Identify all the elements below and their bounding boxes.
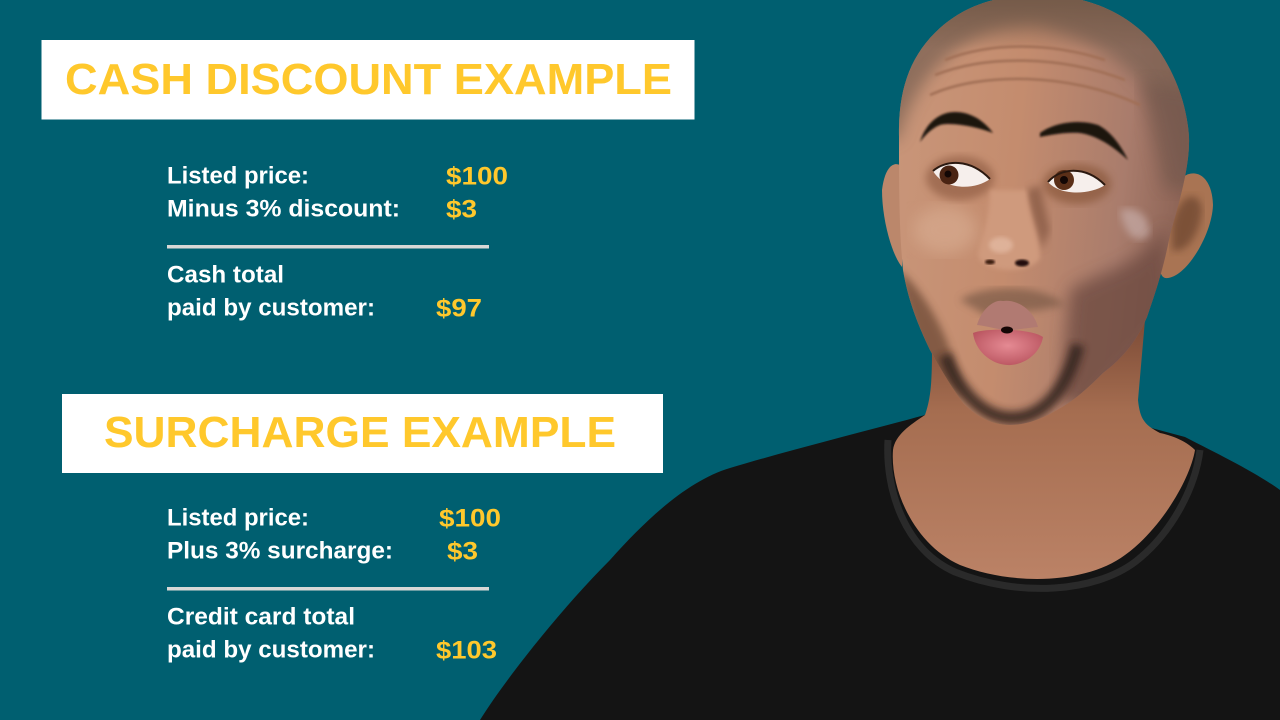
mouth [1001,326,1013,334]
surcharge calculation: paid by customer: [167,636,375,664]
surcharge calculation: $103 [436,636,497,664]
stubble beard left [903,270,962,399]
surcharge calculation: Listed price: [167,504,309,532]
brow right [1040,122,1128,160]
forehead wrinkles [930,46,1140,105]
surcharge calculation: $3 [447,538,478,566]
heading: cash discount example: CASH DISCOUNT EXAMPLE [65,55,672,104]
eye right [1043,164,1111,204]
goatee [945,345,1078,418]
eye left [926,156,994,200]
right-side temple stubble [1138,82,1189,192]
heading: surcharge example [62,394,663,473]
ear right [1160,173,1213,278]
cash discount calculation: $3 [446,196,477,224]
head [898,0,1190,425]
cash discount calculation: $100 [446,162,508,190]
surcharge calculation: $100 [439,504,501,532]
surcharge calculation [167,504,501,664]
cash discount calculation [167,162,508,322]
cash discount calculation: Minus 3% discount: [167,196,400,222]
surcharge calculation: Credit card total [167,604,355,630]
heading: surcharge example: SURCHARGE EXAMPLE [104,408,616,457]
neck [893,320,1195,579]
cash discount calculation: Cash total [167,262,284,288]
neckline [888,440,1200,588]
shirt [480,415,1280,720]
ear left [882,164,903,267]
lips [973,301,1043,365]
scalp stubble [899,0,1189,156]
cash discount calculation: paid by customer: [167,294,375,322]
brow left [920,112,993,142]
cash discount calculation: Listed price: [167,162,309,190]
moustache [960,288,1065,315]
cheek highlight [1120,209,1150,240]
cash discount calculation: $97 [436,294,482,322]
nose [978,185,1050,270]
photo: surprised man looking left [480,0,1280,720]
stubble beard right [1060,225,1170,410]
heading: cash discount example [42,40,694,120]
surcharge calculation: Plus 3% surcharge: [167,538,393,564]
